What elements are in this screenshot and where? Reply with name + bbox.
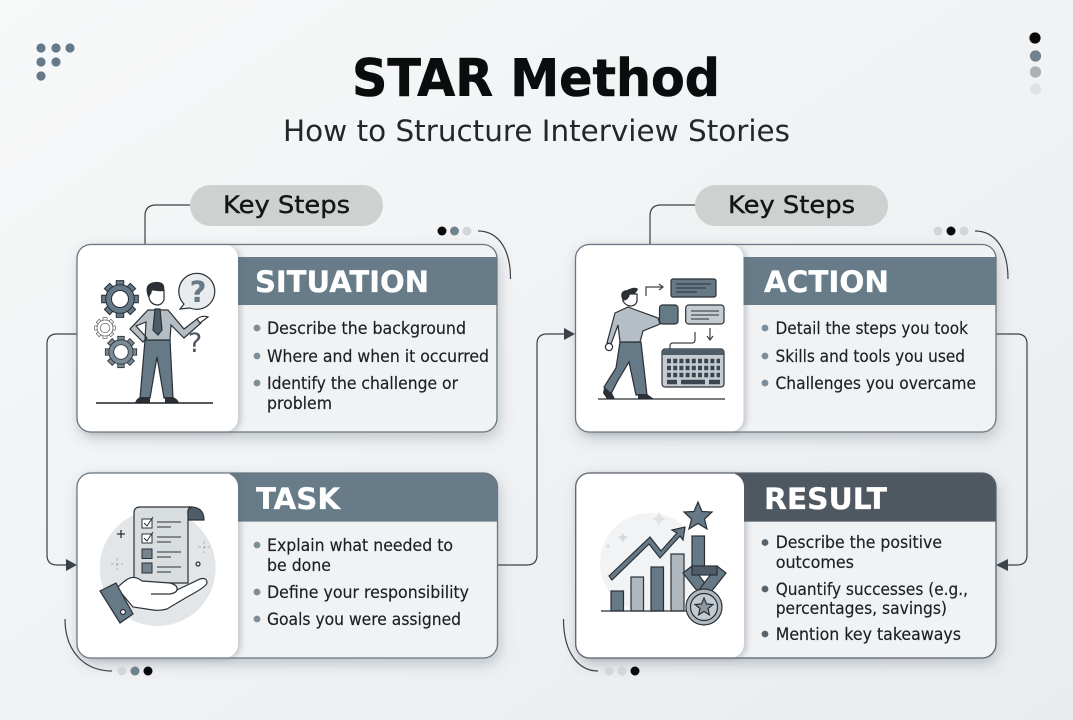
icon: top-left dot grid bbox=[36, 43, 75, 81]
icon: person arranging interface blocks bbox=[598, 279, 725, 399]
bullet list: result bbox=[762, 533, 968, 644]
decoration: action progress dots bbox=[934, 226, 1008, 279]
icon: hand holding checklist bbox=[100, 507, 216, 626]
key steps pill: right bbox=[650, 185, 888, 245]
bullet list: situation: problem bbox=[267, 394, 332, 413]
arrow: task to action bbox=[497, 328, 575, 565]
heading: result: RESULT bbox=[764, 482, 887, 516]
bullet list: situation: Describe the background bbox=[267, 319, 466, 338]
header band: result bbox=[735, 473, 996, 522]
panel: task bbox=[77, 473, 498, 658]
header band: task bbox=[230, 473, 498, 522]
heading: situation: SITUATION bbox=[255, 265, 429, 299]
icon: man with gears and question: ? bbox=[188, 328, 202, 359]
bullet list: task: be done bbox=[267, 556, 331, 575]
bullet list: action: Detail the steps you took bbox=[776, 319, 968, 338]
header band: situation bbox=[230, 257, 497, 305]
bullet list: task: Goals you were assigned bbox=[267, 610, 461, 629]
bullet list: result: Mention key takeaways bbox=[776, 625, 961, 644]
bullet list: situation: Identify the challenge or bbox=[267, 374, 458, 393]
key steps pill: right: Key Steps bbox=[728, 191, 855, 219]
heading: action: ACTION bbox=[764, 265, 889, 299]
heading: task: TASK bbox=[256, 482, 341, 516]
title: STAR Method bbox=[352, 49, 720, 109]
panel: result bbox=[576, 473, 996, 658]
bullet list: result: percentages, savings) bbox=[776, 599, 947, 618]
bullet list: task: Define your responsibility bbox=[267, 583, 469, 602]
subtitle: How to Structure Interview Stories bbox=[283, 114, 790, 148]
icon: growth chart with star and medal bbox=[600, 502, 726, 625]
bullet list: action: Challenges you overcame bbox=[776, 374, 976, 393]
panel: situation bbox=[77, 244, 497, 432]
arrow: situation to task bbox=[47, 334, 77, 571]
bullet list: result: Describe the positive bbox=[776, 533, 942, 552]
bullet list: action bbox=[762, 319, 976, 393]
bullet list: result: outcomes bbox=[776, 553, 854, 572]
icon: man with gears and question bbox=[95, 273, 215, 403]
decoration: result progress dots bbox=[564, 619, 640, 676]
key steps pill: left: Key Steps bbox=[223, 191, 350, 219]
header band: action bbox=[735, 257, 996, 305]
bullet list: action: Skills and tools you used bbox=[776, 347, 965, 366]
decoration: situation progress dots bbox=[438, 226, 510, 279]
key steps pill: left bbox=[145, 185, 383, 245]
panel: action bbox=[576, 244, 996, 432]
icon: man with gears and question: ? bbox=[190, 275, 206, 309]
icon: top-right vertical dots bbox=[1029, 32, 1041, 95]
arrow: action to result bbox=[996, 334, 1027, 571]
bullet list: situation: Where and when it occurred bbox=[267, 347, 489, 366]
bullet list: task bbox=[254, 536, 469, 629]
bullet list: result: Quantify successes (e.g., bbox=[776, 580, 968, 599]
bullet list: task: Explain what needed to bbox=[267, 536, 453, 555]
bullet list: situation bbox=[254, 319, 489, 413]
decoration: task progress dots bbox=[65, 619, 152, 676]
